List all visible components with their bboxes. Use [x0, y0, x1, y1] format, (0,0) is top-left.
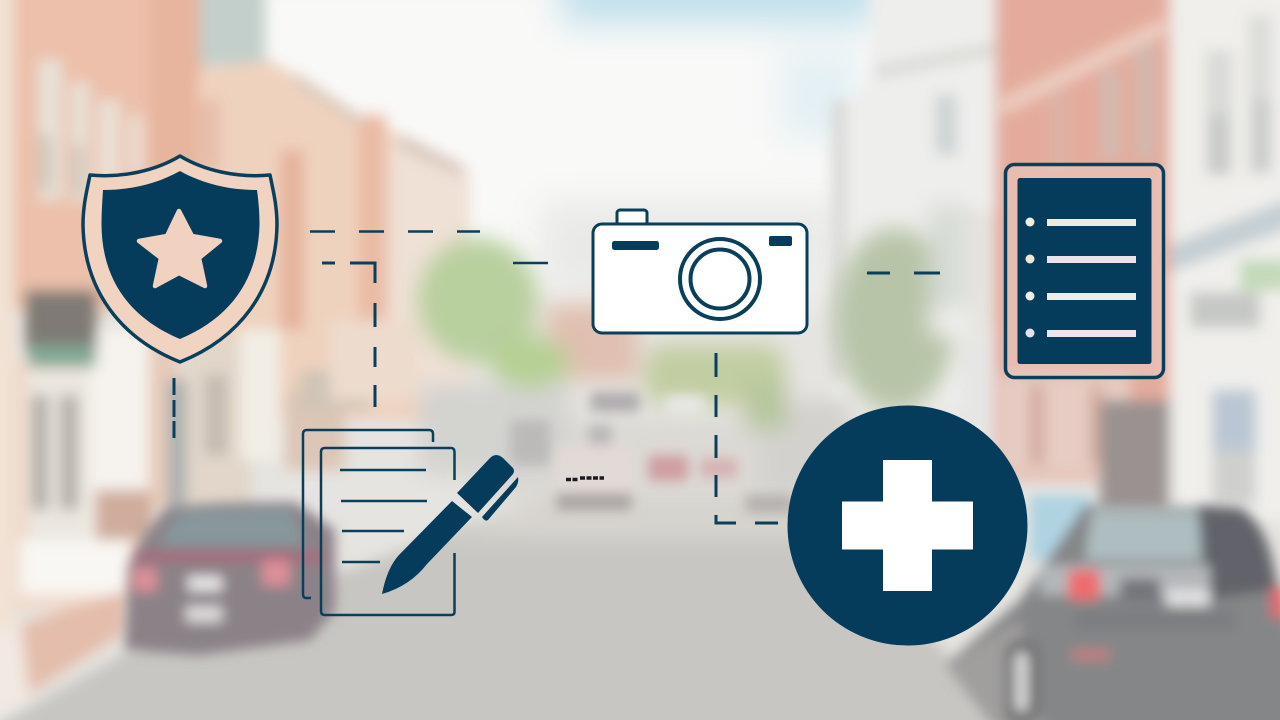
back sheet [303, 430, 433, 598]
connector: tiny dark marks [566, 478, 604, 480]
road base [0, 525, 1020, 720]
icon: shield with star [83, 156, 277, 362]
small distant cars [555, 445, 633, 505]
right buildings [832, 0, 995, 410]
left car [125, 502, 335, 655]
distant street haze [440, 500, 850, 540]
left storefront [14, 360, 154, 610]
icon: documents with pen [303, 430, 518, 615]
icon: camera [593, 210, 807, 333]
text lines [340, 470, 427, 562]
right car [1030, 495, 1090, 560]
connector: shield to camera, upper dashed line [310, 230, 480, 233]
left windows [38, 60, 62, 200]
connector: shield to documents, vertical [172, 378, 176, 438]
connector: camera to checklist [867, 272, 940, 274]
front sheet [321, 448, 454, 615]
connector: short dash to camera [513, 262, 548, 264]
icon: checklist tablet [1006, 164, 1164, 378]
trees [418, 238, 538, 362]
connector: camera to medical circle [716, 353, 778, 523]
icon: medical cross circle [788, 406, 1028, 646]
pen [382, 501, 472, 594]
connector: shield to documents, elbow [322, 263, 375, 407]
left buildings [0, 0, 16, 700]
